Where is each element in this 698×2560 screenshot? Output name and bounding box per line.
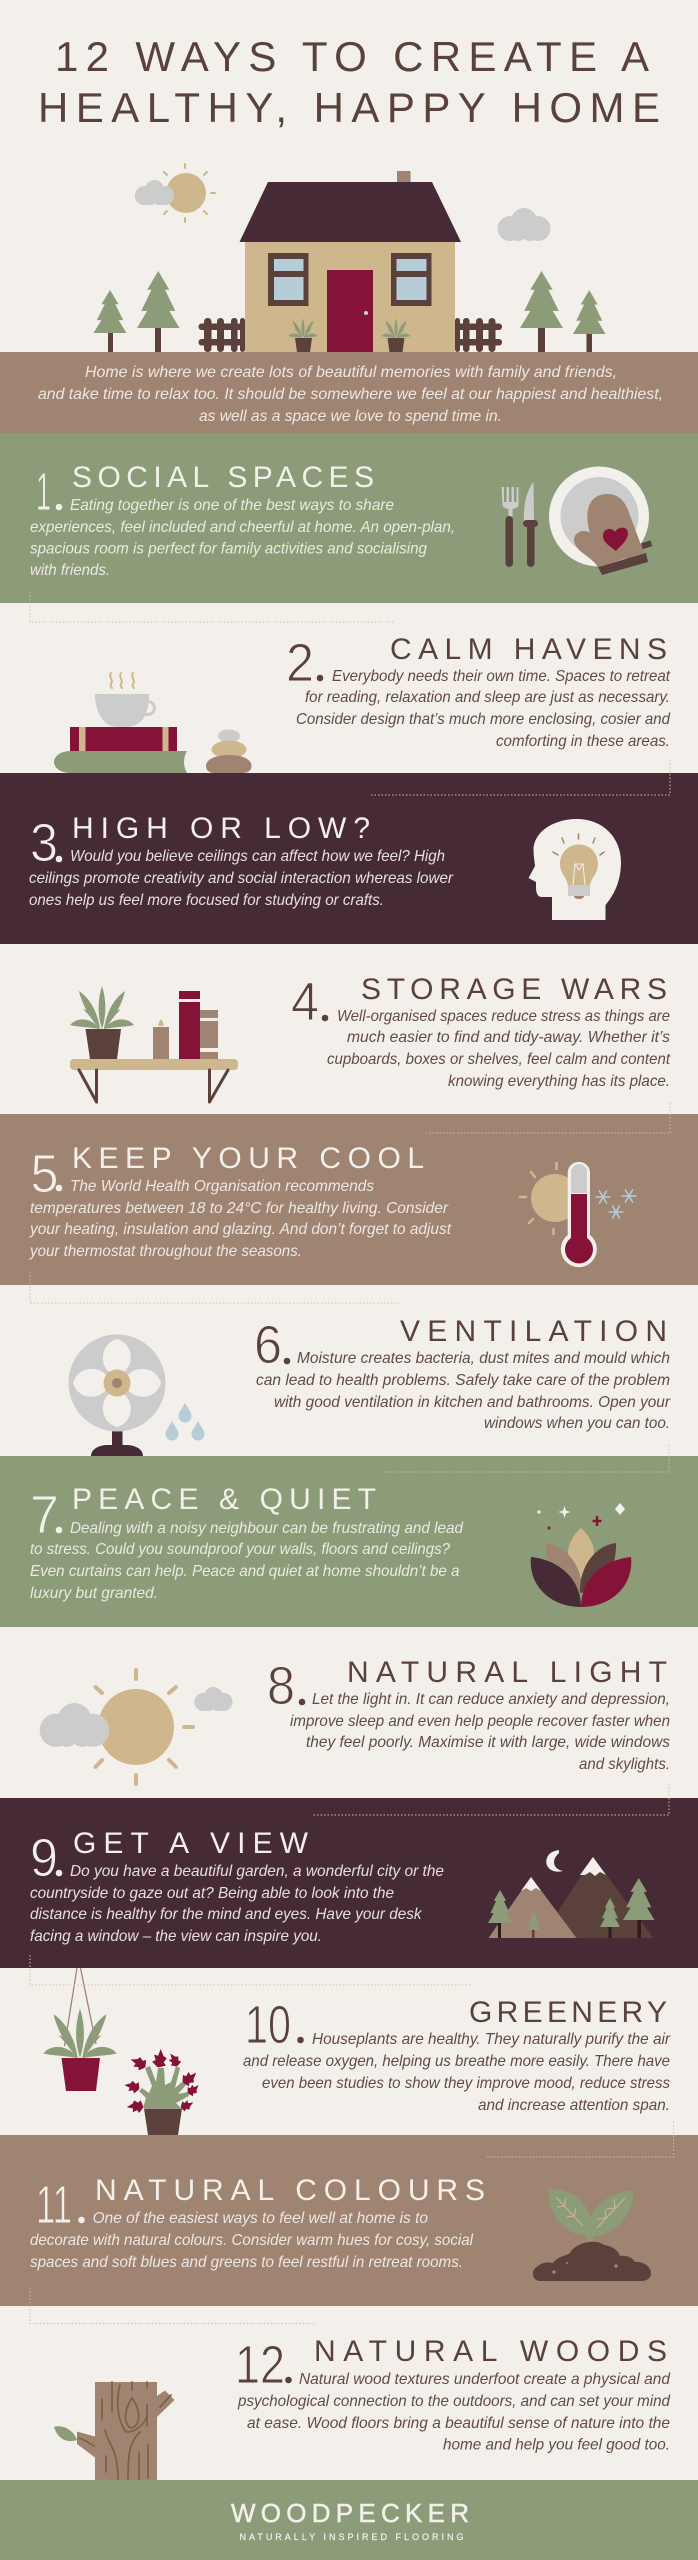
icon: fan and water drops [68, 1334, 204, 1456]
heading: NATURAL WOODS [314, 2335, 667, 2368]
body text: Dealing with a noisy neighbour can be frustrating and lead [70, 1520, 464, 1537]
number: 5 [30, 1144, 58, 1204]
body text [30, 1520, 464, 1602]
body text: and skylights. [579, 1756, 670, 1773]
panel: 12 natural woods [30, 2288, 671, 2480]
body text: Everybody needs their own time. Spaces to retreat [332, 668, 671, 685]
dot [284, 1358, 290, 1364]
body text: Moisture creates bacteria, dust mites and mould which [297, 1350, 670, 1367]
number: 3 [30, 813, 58, 873]
body text: One of the easiest ways to feel well at home is to [93, 2210, 428, 2227]
icon: tea cup, books and stones [54, 673, 252, 773]
number: 9 [30, 1828, 58, 1888]
body text [290, 1691, 670, 1773]
body text: Well-organised spaces reduce stress as things are [337, 1008, 670, 1025]
body text: spacious room is perfect for family activities and socialising [30, 540, 427, 558]
dotted connector [370, 760, 670, 795]
heading: VENTILATION [400, 1315, 667, 1348]
body text [243, 2031, 671, 2114]
panel: 8 natural light [40, 1656, 670, 1784]
body text: ceilings promote creativity and social interaction whereas lower [29, 870, 454, 887]
body text: comforting in these areas. [496, 733, 670, 750]
heading: GREENERY [469, 1996, 667, 2029]
panel: intro: as well as a space we love to spend time in. [199, 408, 502, 425]
panel: 5 keep your cool [0, 1103, 698, 1285]
dotted connector [426, 1103, 670, 1133]
dot [285, 2377, 292, 2383]
number: 10 [245, 1995, 291, 2055]
body text [30, 497, 455, 579]
icon: head with light bulb [528, 819, 621, 920]
body text: your thermostat throughout the seasons. [29, 1243, 302, 1260]
icon: cutlery, plate and oven mitt [502, 466, 652, 575]
icon: lotus with sparkles [531, 1503, 631, 1607]
body text: Even curtains can help. Peace and quiet at home shouldn’t be a [30, 1563, 460, 1580]
icon: sun behind cloud [135, 164, 215, 222]
body text: to stress. Could you soundproof your walls, floors and ceilings? [30, 1541, 450, 1558]
body text: Houseplants are healthy. They naturally purify the air [312, 2031, 671, 2048]
body text [29, 848, 454, 909]
panel: 1 social spaces: 1 [36, 462, 51, 522]
icon: mountains, moon and trees [488, 1850, 654, 1938]
dotted connector [486, 2122, 674, 2157]
body text: Would you believe ceilings can affect how we feel? High [70, 848, 445, 865]
dot [317, 675, 323, 681]
brand name: WOODPECKER [231, 2498, 469, 2528]
body text: Consider design that’s much more enclosing, cosier and [296, 711, 671, 728]
icon: fences [198, 318, 502, 352]
panel: intro: and take time to relax too. It should be somewhere we feel at our happiest and healthiest, [38, 386, 663, 403]
panel: 10 greenery [30, 1955, 671, 2135]
body text: Eating together is one of the best ways to share [70, 497, 394, 514]
number: 6 [254, 1315, 282, 1375]
body text: windows when you can too. [484, 1415, 670, 1432]
title: 12 WAYS TO CREATE A [55, 33, 649, 80]
body text: can lead to health problems. Safely take care of the problem [256, 1372, 670, 1389]
dotted connector [30, 1955, 472, 1985]
dotted connector [381, 1445, 669, 1472]
panel: 6 ventilation [30, 1272, 671, 1456]
panel: 2 calm havens [54, 633, 671, 773]
tagline: NATURALLY INSPIRED FLOORING [240, 2532, 464, 2542]
dotted connector [313, 1784, 669, 1815]
illustration: house and garden [94, 164, 606, 352]
body text: they feel poorly. Maximise it with large, wide windows [306, 1734, 670, 1751]
panel: footer [0, 2480, 698, 2560]
heading: PEACE & QUIET [72, 1483, 376, 1516]
body text [327, 1008, 671, 1090]
dot [56, 1527, 62, 1533]
body text: with good ventilation in kitchen and bathrooms. Open your [274, 1394, 671, 1411]
body text [29, 1178, 452, 1260]
icon: house [240, 171, 461, 352]
body text [237, 2371, 671, 2454]
dot [56, 856, 62, 862]
body text: cupboards, boxes or shelves, feel calm and content [327, 1051, 671, 1068]
dot [56, 504, 62, 510]
heading: NATURAL LIGHT [347, 1656, 667, 1689]
body text: temperatures between 18 to 24°C for healthy living. Consider [30, 1200, 449, 1217]
panel: 3 high or low [0, 760, 698, 944]
body text: home and help you feel good too. [443, 2436, 670, 2454]
title [38, 33, 660, 131]
panel: 9 get a view [0, 1784, 698, 1968]
panel: intro [0, 352, 698, 433]
icon: seedling in soil [533, 2188, 651, 2281]
body text: much easier to find and tidy-away. Whether it’s [347, 1029, 670, 1046]
body text [30, 1863, 444, 1945]
body text: psychological connection to the outdoors, and can set your mind [237, 2393, 671, 2410]
number: 11 [36, 2175, 72, 2235]
body text: spaces and soft blues and greens to feel restful in retreat rooms. [30, 2254, 463, 2271]
body text: even been studies to show they improve mood, reduce stress [262, 2075, 670, 2092]
body text: ones help us feel more focused for studying or crafts. [29, 892, 384, 909]
title: HEALTHY, HAPPY HOME [38, 84, 660, 131]
body text [30, 2210, 473, 2271]
number: 8 [267, 1656, 295, 1716]
heading: HIGH OR LOW? [72, 812, 370, 845]
body text [256, 1350, 671, 1432]
body text: and increase attention span. [478, 2097, 670, 2114]
body text: countryside to gaze out at? Being able to look into the [30, 1885, 394, 1902]
icon: shelf with plant, candle and books [70, 986, 238, 1102]
body text: Natural wood textures underfoot create a physical and [299, 2371, 671, 2388]
body text: experiences, feel included and cheerful at home. An open-plan, [30, 519, 455, 536]
panel: intro: Home is where we create lots of beautiful memories with family and friends, [85, 364, 617, 381]
heading: STORAGE WARS [361, 973, 667, 1006]
icon: hanging plant and potted flower [43, 1968, 202, 2135]
body text: with friends. [30, 562, 110, 579]
heading: CALM HAVENS [390, 633, 667, 666]
dot [299, 1699, 305, 1705]
heading: NATURAL COLOURS [95, 2174, 485, 2207]
dotted connector [30, 592, 394, 622]
body text: improve sleep and even help people recover faster when [290, 1713, 670, 1730]
body text: distance is healthy for the mind and eyes. Have your desk [30, 1906, 422, 1923]
icon: sun and clouds [40, 1670, 233, 1784]
heading: KEEP YOUR COOL [72, 1142, 424, 1175]
panel: 4 storage wars [70, 972, 671, 1102]
number: 4 [291, 972, 319, 1032]
body text: decorate with natural colours. Consider warm hues for cosy, social [30, 2232, 473, 2249]
dotted connector [30, 2288, 316, 2324]
dot [78, 2217, 85, 2223]
body text: luxury but granted. [30, 1585, 158, 1602]
body text: facing a window – the view can inspire you. [30, 1928, 322, 1945]
body text: for reading, relaxation and sleep are just as necessary. [305, 689, 670, 706]
dot [56, 1870, 62, 1876]
number: 7 [30, 1485, 59, 1545]
icon: cloud right [498, 208, 550, 241]
heading: GET A VIEW [73, 1827, 309, 1860]
body text: Let the light in. It can reduce anxiety and depression, [312, 1691, 670, 1708]
panel: 7 peace and quiet [0, 1445, 698, 1627]
body text: The World Health Organisation recommends [70, 1178, 374, 1195]
panel: 11 natural colours [0, 2122, 698, 2306]
icon: sun, thermometer and snowflakes [520, 1162, 636, 1267]
body text: your heating, insulation and glazing. And don’t forget to adjust [29, 1221, 452, 1238]
dotted connector [30, 1272, 400, 1303]
number: 12 [235, 2335, 285, 2395]
dot [297, 2037, 304, 2043]
number: 2 [286, 633, 314, 693]
body text [296, 668, 671, 750]
dot [56, 1185, 62, 1191]
icon: trees [94, 271, 606, 352]
body text: at ease. Wood floors bring a beautiful sense of nature into the [247, 2415, 670, 2432]
panel: 1 social spaces [0, 433, 698, 622]
dot [322, 1015, 328, 1021]
body text: and release oxygen, helping us breathe more easily. There have [243, 2053, 670, 2070]
icon: tree trunk [54, 2382, 174, 2480]
body text: knowing everything has its place. [448, 1073, 670, 1090]
heading: SOCIAL SPACES [72, 461, 374, 494]
body text: Do you have a beautiful garden, a wonderful city or the [70, 1863, 444, 1880]
